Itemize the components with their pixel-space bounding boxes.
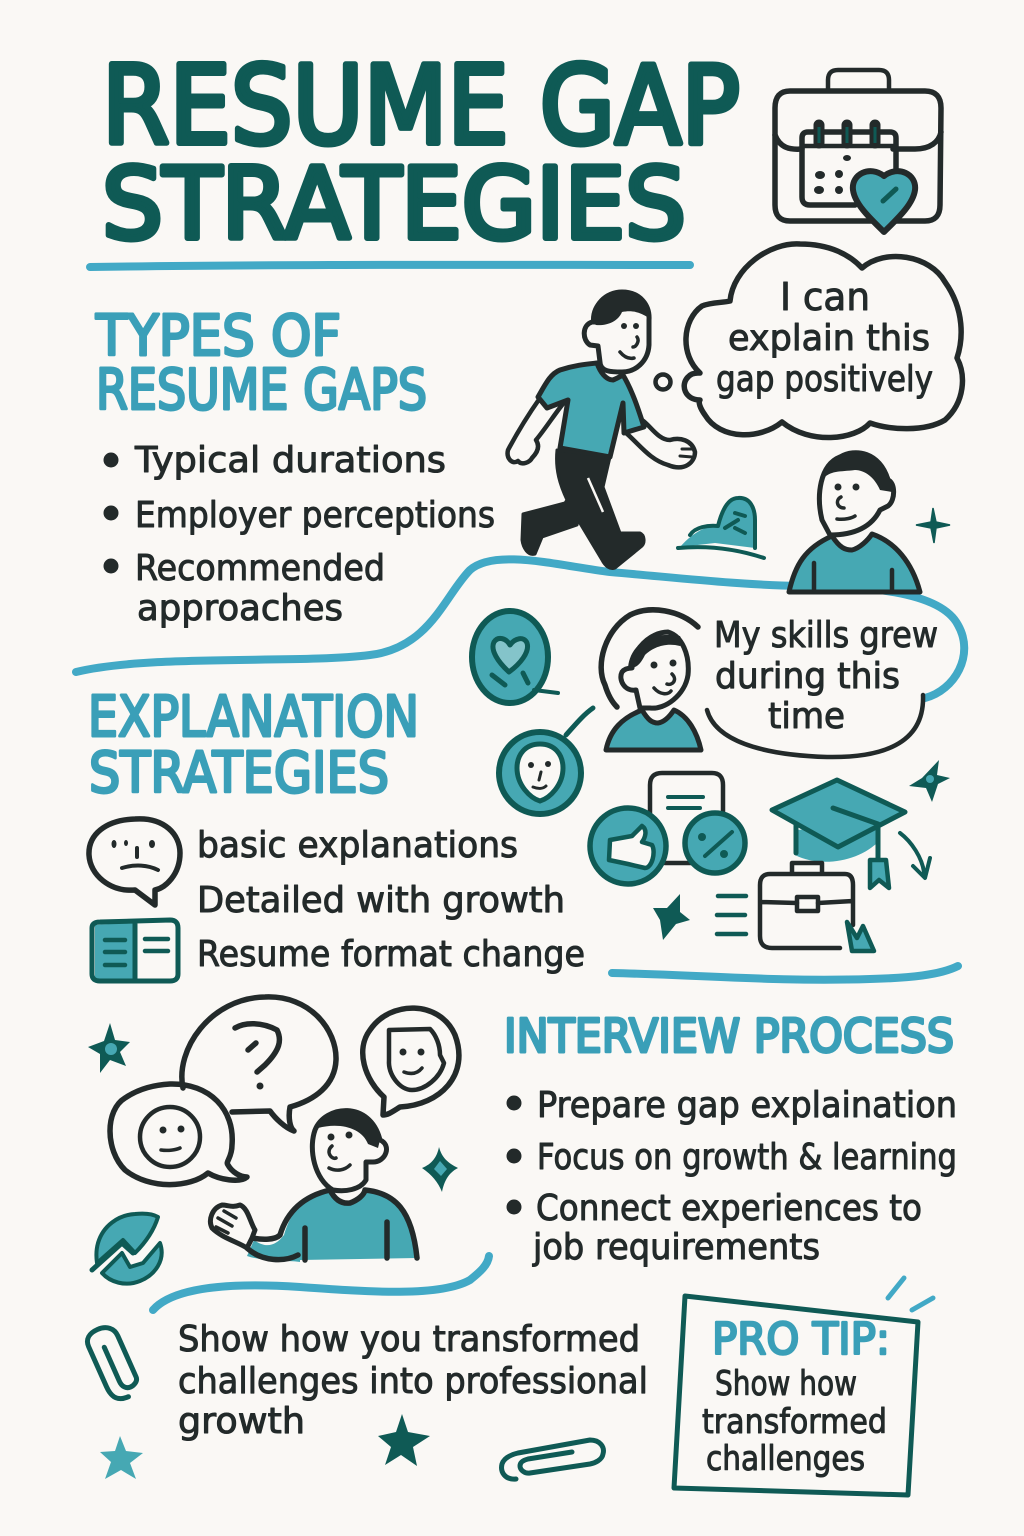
speech text: my skills grew during this time: time [768,696,845,737]
list: explanation strategies: Resume format change [197,934,585,975]
icon: graduation cap [772,780,930,888]
illustration: person talking [210,1110,417,1262]
thought bubble: I can explain this gap positively [656,244,962,438]
callout: pro tip: Show how [715,1364,857,1404]
icon: paperclip vertical [84,1323,142,1403]
illustration: walking person [508,292,695,569]
icon: briefcase with arrow [760,863,874,951]
icon: teal signpost mound [678,498,764,558]
list: explanation strategies: Detailed with growth [197,880,565,921]
closing statement: Show how you transformed [178,1319,640,1360]
icon: open book [92,920,178,981]
icon: document with thumbs up and percent badges [590,773,745,884]
illustration: interview speech bubbles [110,997,459,1185]
thought bubble: I can explain this gap positively: explain this [728,318,930,359]
title [102,44,740,262]
list: interview process [507,1085,957,1268]
callout: pro tip [674,1278,933,1495]
list: types of resume gaps: Recommended [135,548,385,589]
heading: explanation strategies: STRATEGIES [89,741,389,806]
title underline [90,265,690,267]
speech text: my skills grew during this time: My skills grew [714,615,938,656]
thought bubble: I can explain this gap positively: I can [780,275,870,319]
heading: interview process: INTERVIEW PROCESS [504,1009,954,1063]
icon: heart badge [472,611,558,703]
sparkle: teal star bottom [378,1414,430,1466]
icon: growth arrow circle [92,1214,162,1284]
sparkle: teal star over cap [909,760,950,802]
list: types of resume gaps [104,440,495,629]
heading: types of resume gaps [95,304,427,423]
callout: pro tip: transformed [702,1402,887,1442]
list: explanation strategies [197,825,585,975]
sparkle: blue star [100,1436,143,1479]
thought bubble: I can explain this gap positively: gap positively [716,359,933,400]
list: explanation strategies: basic explanations [197,825,518,866]
illustration: second person [789,453,920,592]
wavy divider: first section path [76,559,964,698]
closing statement [178,1319,648,1442]
title: STRATEGIES [102,148,686,262]
illustration: third person with speech outline [601,610,923,757]
list: interview process: Prepare gap explaination [537,1085,957,1126]
callout: pro tip: PRO TIP: [712,1314,890,1365]
list: types of resume gaps: Typical durations [134,440,446,481]
divider: middle blue stroke [612,966,958,980]
icon: speech bubble with face [89,819,180,905]
icon: teal star with lines [653,894,746,940]
callout: pro tip: challenges [706,1439,865,1479]
divider: lower blue stroke [153,1256,489,1310]
icon: briefcase with calendar and heart [775,70,941,232]
sparkle: star upper left [88,1023,130,1073]
closing statement: challenges into professional [178,1361,648,1402]
heading: types of resume gaps: RESUME GAPS [96,358,427,423]
heading: explanation strategies: EXPLANATION [88,685,419,750]
list: types of resume gaps: approaches [137,588,343,629]
list: interview process: Connect experiences to [536,1188,922,1229]
speech text: my skills grew during this time [714,615,938,737]
icon: face badge [499,708,593,814]
list: types of resume gaps: Employer perceptions [135,495,495,536]
icon: paperclip horizontal [502,1440,603,1479]
closing statement: growth [178,1401,305,1442]
list: interview process: job requirements [532,1227,820,1268]
heading: explanation strategies [88,685,419,806]
title: RESUME GAP [102,44,740,169]
list: interview process: Focus on growth & learning [537,1137,957,1178]
sparkle: teal plus [916,508,950,543]
speech text: my skills grew during this time: during this [715,656,900,697]
sparkle: diamond star right [422,1147,458,1192]
heading: types of resume gaps: TYPES OF [95,304,341,369]
